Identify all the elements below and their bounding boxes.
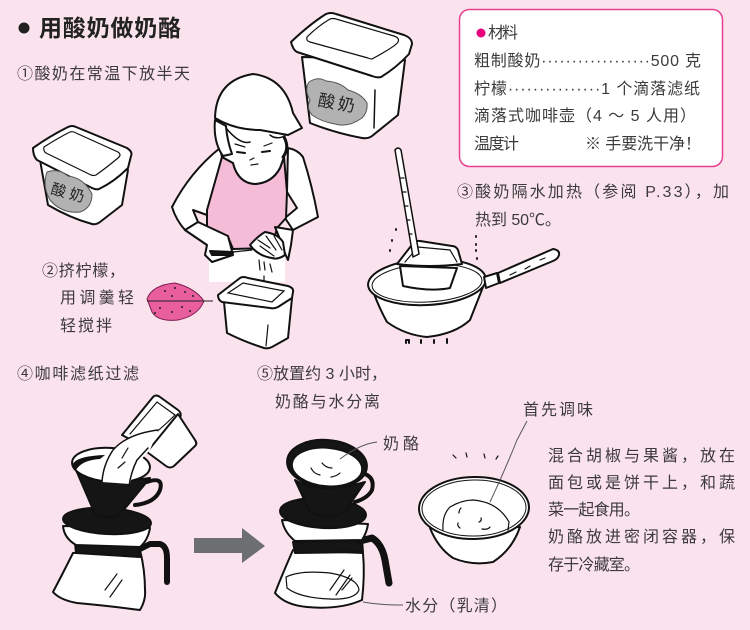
illustration: carafe with separated cheese — [275, 437, 389, 608]
step 2 label: 轻搅拌 — [60, 317, 112, 335]
icon: lemon — [147, 283, 213, 320]
step 5 label: 奶酪与水分离 — [275, 393, 380, 411]
text block: serving notes — [548, 447, 735, 574]
panel: materials: 柠檬···············1 个滴落滤纸 — [474, 80, 700, 98]
label: whey — [363, 597, 507, 615]
panel: materials — [460, 10, 722, 166]
step 5 label: ⑤放置约 3 小时， — [257, 360, 387, 384]
panel: materials: 粗制酸奶··················500 克 — [474, 52, 701, 70]
label: season first: 首先调味 — [523, 401, 593, 419]
step 3 label: 热到 50℃。 — [475, 211, 561, 229]
illustration: person squeezing lemon — [172, 74, 318, 296]
text block: serving notes: 面包或是饼干上，和蔬 — [548, 474, 735, 492]
step 2 label: ②挤柠檬， — [42, 257, 125, 281]
step 4 label: ④咖啡滤纸过滤 — [17, 360, 139, 384]
icon: small yogurt tub: 酸奶 — [49, 181, 86, 206]
panel: materials: ※ 手要洗干净！ — [585, 135, 701, 153]
icon: saucepan with thermometer — [367, 148, 559, 343]
text block: serving notes: 奶酪放进密闭容器，保 — [548, 528, 735, 546]
label: curd: 奶酪 — [383, 435, 419, 453]
step 2 label — [42, 257, 134, 335]
illustration: pouring yogurt into dripper — [53, 396, 196, 610]
step 3 label — [457, 178, 729, 229]
text block: serving notes: 混合胡椒与果酱，放在 — [548, 447, 735, 465]
icon: yogurt tub with lemon drops — [218, 277, 293, 348]
step 5 label — [257, 360, 387, 411]
illustration: bowl of cheese — [418, 421, 530, 563]
panel: materials: 材料 — [488, 24, 518, 42]
label: curd — [340, 435, 419, 459]
icon: large yogurt tub — [291, 13, 412, 138]
text block: serving notes: 存于冷藏室。 — [548, 556, 640, 574]
label: whey: 水分（乳清） — [405, 597, 507, 615]
icon: large yogurt tub: 酸奶 — [317, 91, 356, 116]
arrow — [194, 528, 265, 563]
title: 用酸奶做奶酪 — [39, 15, 181, 41]
step 3 label: ③酸奶隔水加热（参阅 P.33），加 — [457, 178, 729, 202]
text block: serving notes: 菜一起食用。 — [548, 501, 640, 519]
step 1 label: ①酸奶在常温下放半天 — [17, 60, 190, 84]
panel: materials: 温度计 — [474, 135, 519, 153]
panel: materials: 滴落式咖啡壶（4 ～ 5 人用） — [474, 107, 696, 125]
icon: small yogurt tub — [33, 126, 132, 224]
step 2 label: 用调羹轻 — [60, 289, 134, 307]
